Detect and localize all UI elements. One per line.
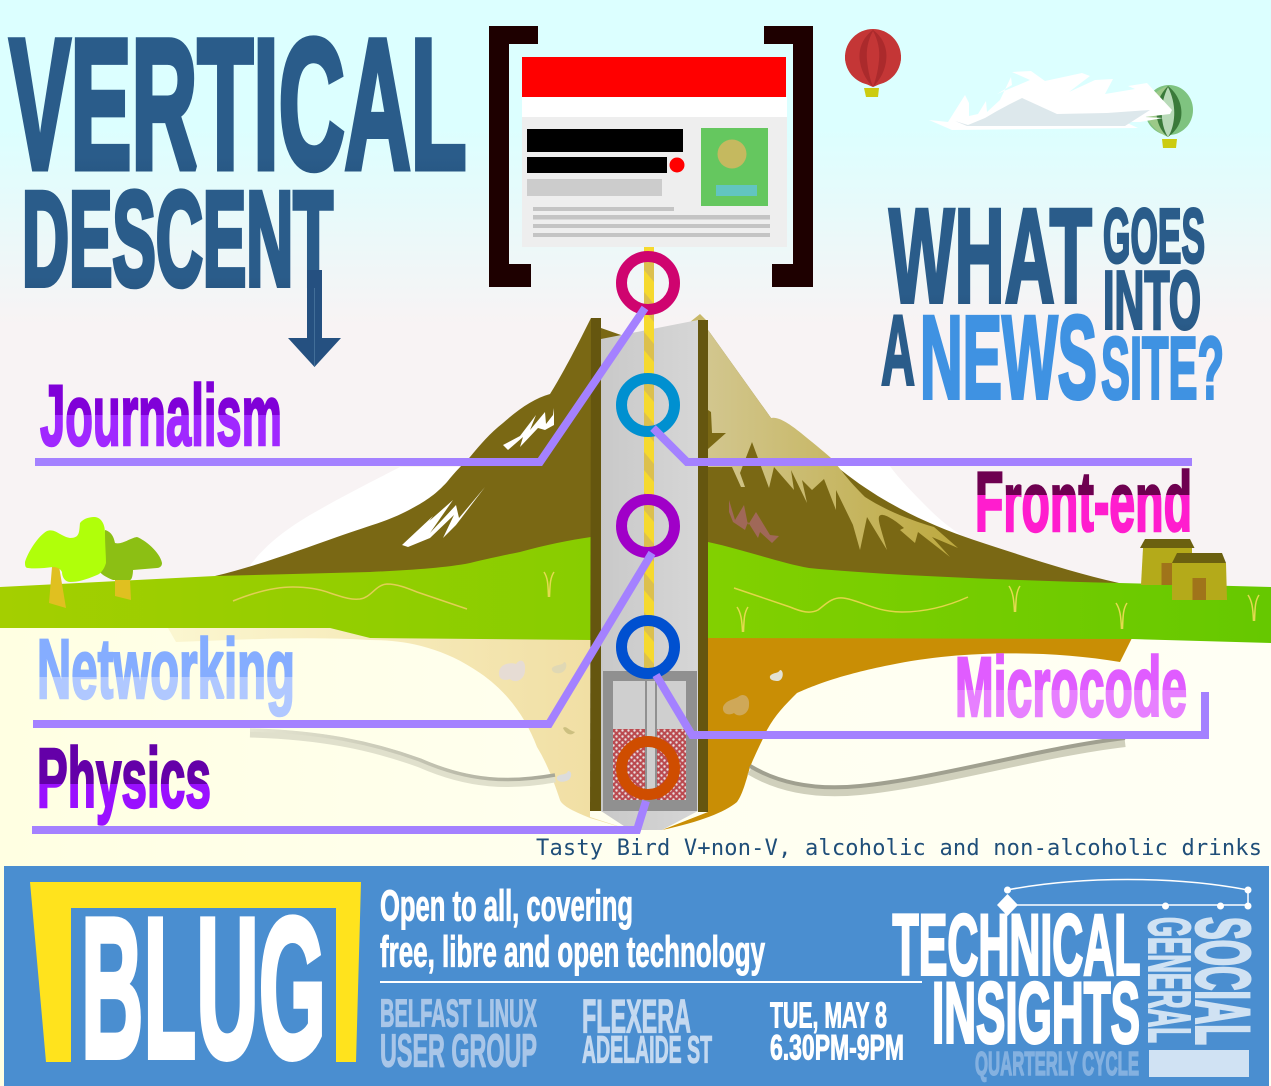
ring: physics (622, 742, 674, 794)
leader line: networking (33, 553, 652, 724)
panel: footer banner (4, 866, 1269, 1086)
text: VERTICAL (10, 2, 466, 208)
subheading bar (527, 179, 662, 196)
group name: USER GROUP (380, 1024, 537, 1076)
leader line: journalism (35, 308, 645, 462)
caption: drinks: Tasty Bird V+non-V, alcoholic and non-alcoholic drinks (536, 836, 1262, 861)
body text lines (533, 207, 770, 237)
label: networking: Networking (37, 622, 295, 716)
arrow: downward (288, 270, 341, 367)
tagline line one: Open to all, covering (380, 882, 633, 930)
left post (590, 318, 601, 811)
illustration: buried rocks (499, 661, 783, 782)
rope (644, 247, 654, 671)
tagline line two: free, libre and open technology (380, 928, 765, 976)
venue (582, 990, 712, 1072)
date and time (770, 994, 904, 1068)
divider (380, 981, 922, 983)
banner background (4, 866, 1269, 1086)
illustration: grass path right (734, 588, 968, 612)
notification dot (670, 158, 684, 172)
right post (698, 320, 708, 812)
cycle block (1149, 1050, 1249, 1077)
leader line: physics (32, 801, 646, 830)
ring: microcode (622, 620, 674, 674)
illustration: grass sprouts (544, 572, 1259, 632)
illustration: right grass (708, 542, 1271, 643)
illustration: reddish rock streaks (729, 500, 779, 543)
illustration: mountain peak tip (690, 314, 708, 332)
illustration: houses (1140, 539, 1227, 600)
sky background (0, 0, 1271, 640)
text: DESCENT (22, 165, 333, 314)
page nav strip (522, 97, 787, 117)
core chamber (603, 671, 697, 811)
label: journalism: Journalism (40, 368, 282, 464)
leader line: front-end (653, 428, 1192, 462)
heading: what goes into a news site: A (881, 294, 915, 406)
headline bars (527, 129, 683, 173)
word: what: WHAT (889, 182, 1092, 331)
logo frame (30, 882, 361, 1062)
underground background (0, 625, 1271, 1086)
date and time: TUE, MAY 8 (770, 994, 887, 1036)
illustration: green hot air balloon (1145, 85, 1193, 148)
ring: networking (622, 500, 674, 552)
illustration: grass path left (233, 584, 467, 609)
page masthead (522, 57, 786, 97)
illustration: underground river right (750, 738, 1125, 791)
illustration: white snow streaks (402, 408, 554, 547)
illustration: left mountain (215, 318, 621, 600)
illustration: left grass (0, 537, 591, 640)
bezier handle icon (997, 880, 1252, 916)
heading: what goes into a news site (881, 182, 1224, 424)
illustration: underground left (168, 628, 630, 830)
illustration: website mockup in brackets (489, 26, 813, 287)
illustration: right mountain tan cap (708, 330, 958, 557)
word: news: NEWS (920, 292, 1097, 424)
venue: FLEXERA (582, 990, 691, 1042)
illustration: vertical shaft (590, 247, 708, 830)
illustration: trees (25, 517, 162, 608)
group name (380, 992, 537, 1076)
label: physics: Physics (37, 731, 211, 825)
date and time: 6.30PM-9PM (770, 1028, 904, 1068)
image placeholder (701, 128, 768, 206)
right bracket (764, 26, 813, 287)
venue: ADELAIDE ST (582, 1030, 712, 1072)
illustration: red hot air balloon (845, 29, 901, 97)
ring: journalism (622, 256, 674, 310)
shaft body (601, 320, 698, 830)
ring: front-end (622, 378, 674, 432)
illustration: underground river left (250, 730, 555, 783)
illustration: snow behind mountains (248, 465, 978, 568)
group name: BELFAST LINUX (380, 992, 537, 1036)
left bracket (489, 26, 538, 287)
leader line: microcode (656, 675, 1205, 735)
page body (522, 117, 787, 247)
illustration: cloud (929, 71, 1172, 130)
illustration: underground right (662, 638, 1132, 830)
illustration: right mountain (708, 330, 1119, 600)
